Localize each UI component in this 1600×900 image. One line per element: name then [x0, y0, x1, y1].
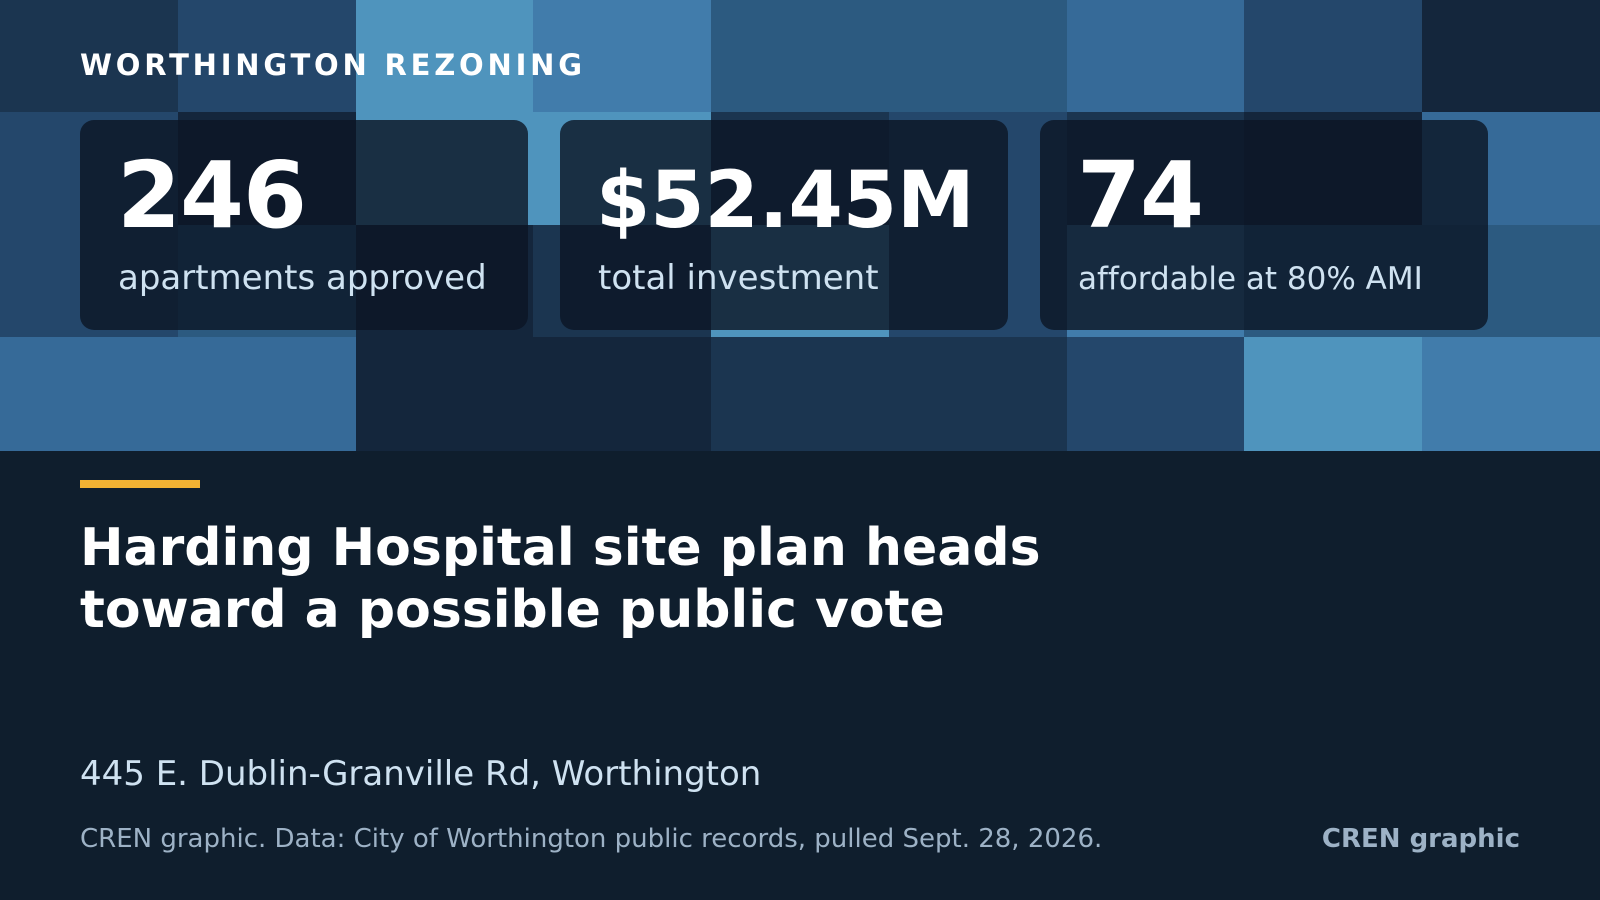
stat label: apartments approved: apartments approved: [118, 258, 487, 298]
mosaic background: [0, 0, 1600, 451]
stat label: total investment: total investment: [598, 258, 879, 298]
credit: CREN graphic: [1322, 824, 1520, 854]
stat label: affordable at 80% AMI: affordable at 80% AMI: [1078, 261, 1423, 297]
address: 445 E. Dublin-Granville Rd, Worthington: [80, 754, 761, 794]
stat number: 246: 246: [117, 142, 306, 249]
stat number: 74: 74: [1077, 142, 1203, 249]
headline: Harding Hospital site plan heads: [80, 518, 1041, 578]
stat number: $52.45M: $52.45M: [596, 156, 975, 246]
headline: [80, 518, 1041, 640]
source note: CREN graphic. Data: City of Worthington public records, pulled Sept. 28, 2026.: [80, 824, 1102, 854]
headline: toward a possible public vote: [80, 580, 945, 640]
eyebrow heading: WORTHINGTON REZONING: [80, 48, 586, 82]
stat card: apartments: [80, 120, 528, 330]
accent bar: [80, 480, 200, 488]
stat card: investment: [560, 120, 1008, 330]
stat card: affordable: [1040, 120, 1488, 330]
